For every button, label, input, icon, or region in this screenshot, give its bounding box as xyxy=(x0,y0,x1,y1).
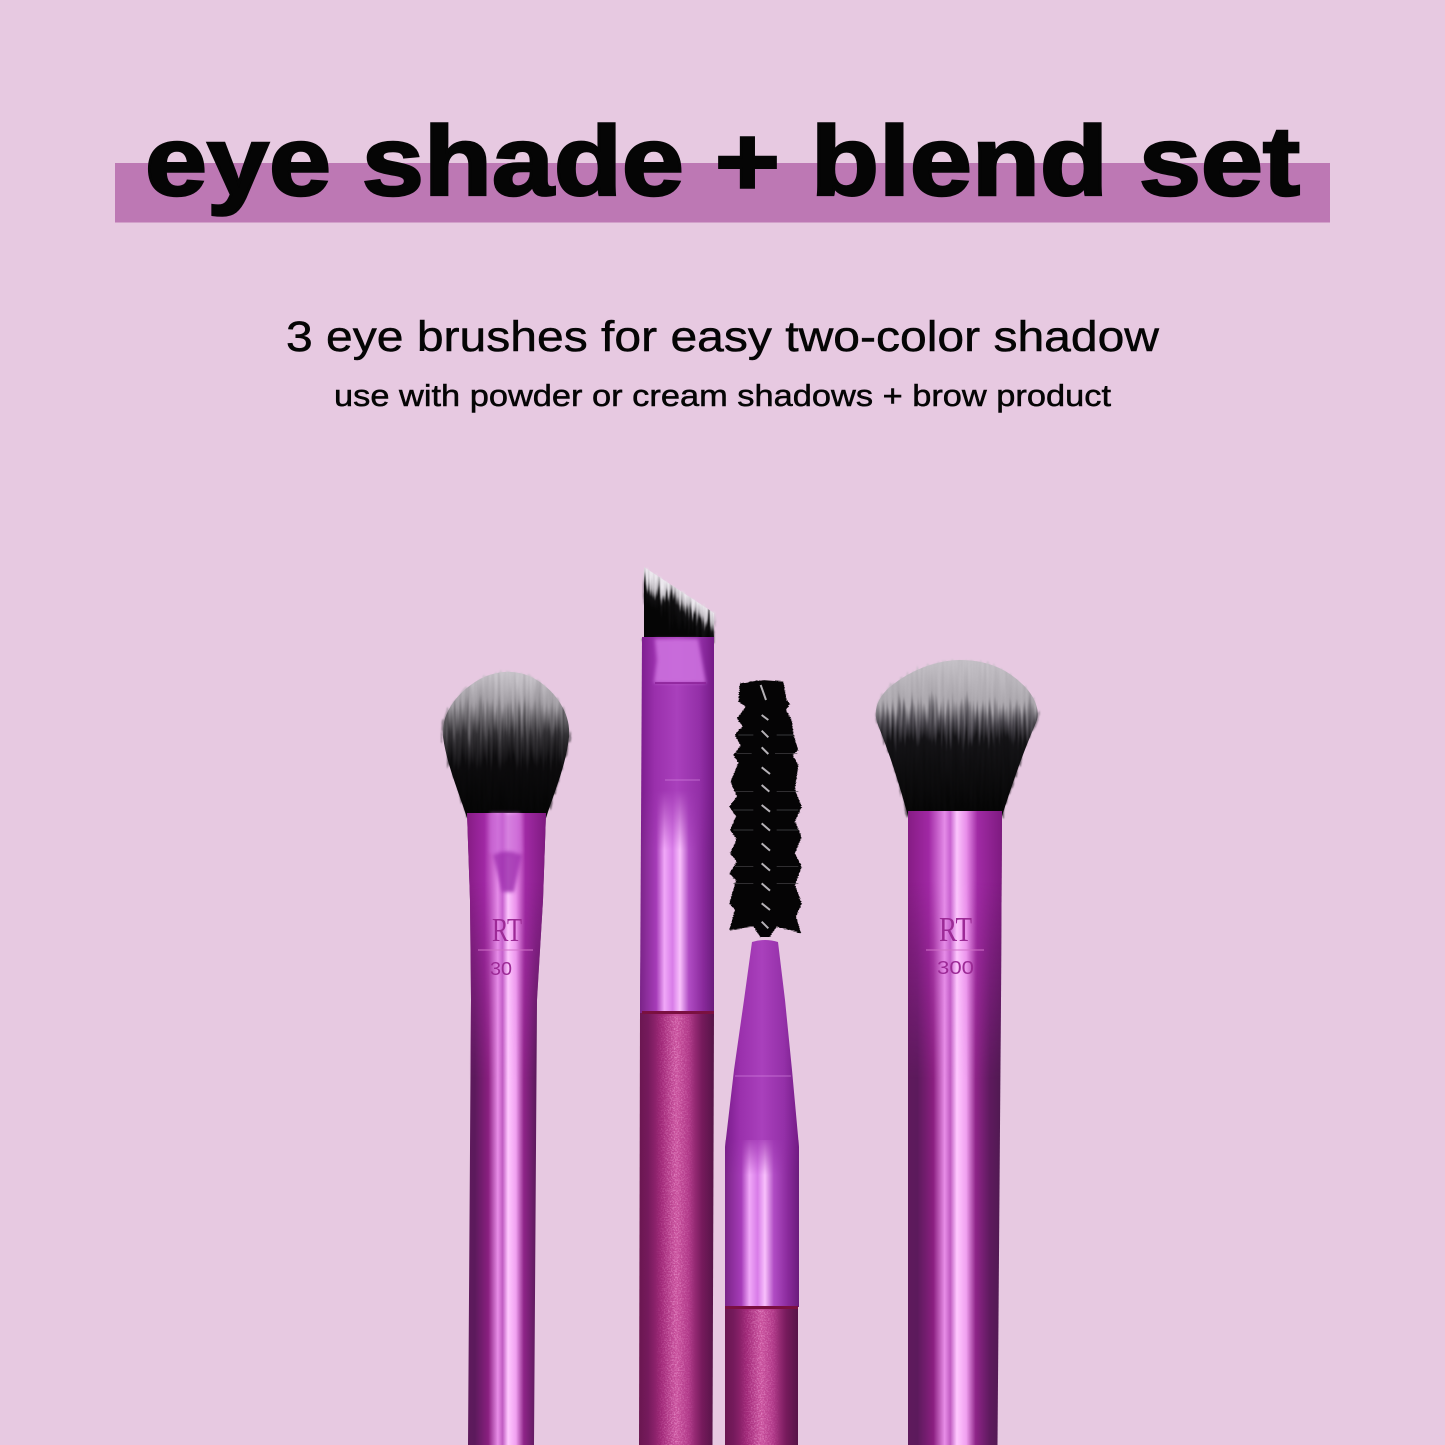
brush 4 logo: RT xyxy=(939,910,972,949)
brush 4 handle xyxy=(908,811,1002,1445)
brush 2 handle xyxy=(639,1013,714,1445)
brush 3 spiral bristles xyxy=(729,680,802,937)
brush 1 bristles xyxy=(440,670,572,819)
title: eye shade + blend set xyxy=(145,106,1300,216)
brush 2 ferrule xyxy=(640,637,714,1014)
brush 1 logo: 30 xyxy=(490,959,512,979)
brush 3: spoolie xyxy=(725,680,802,1445)
brush 4 bristles xyxy=(874,659,1041,820)
brush 1 logo xyxy=(478,912,533,979)
brush 4 logo xyxy=(926,910,984,978)
brush 3 ferrule xyxy=(725,940,799,1309)
heading highlight band xyxy=(115,163,1330,222)
usage note: use with powder or cream shadows + brow product xyxy=(334,378,1111,413)
brush 2: angled liner brush xyxy=(639,567,716,1445)
brush 4 logo: 300 xyxy=(937,958,974,978)
brush 2 bristles xyxy=(640,567,716,644)
brush 4: large blending brush xyxy=(874,659,1041,1445)
brush 1 handle xyxy=(467,813,546,1445)
brush 1: small blending brush xyxy=(415,645,595,1445)
brush 3 handle xyxy=(725,1307,798,1445)
brush 1 logo: RT xyxy=(492,912,522,949)
subtitle: 3 eye brushes for easy two-color shadow xyxy=(286,313,1160,361)
